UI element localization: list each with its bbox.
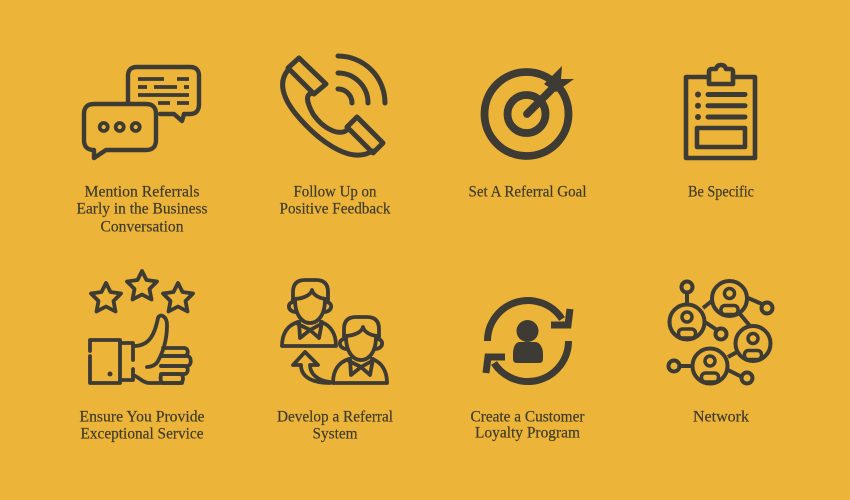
label: referral system: System	[312, 426, 358, 442]
label: loyalty program: Create a Customer	[470, 408, 585, 426]
label: exceptional service: Ensure You Provide	[80, 408, 204, 426]
label: referral goal: Set A Referral Goal	[468, 184, 587, 200]
icon: target with dart	[484, 66, 574, 156]
panel: loyalty program	[470, 301, 585, 442]
label: mention referrals	[76, 184, 208, 236]
label: mention referrals: Mention Referrals	[84, 184, 200, 200]
label: mention referrals: Early in the Business	[76, 200, 208, 218]
icon: lower person	[333, 317, 387, 383]
icon: chat bubbles	[84, 67, 199, 158]
icon: two people with arrow	[282, 280, 387, 383]
icon: upper person	[282, 280, 336, 346]
label: be specific: Be Specific	[688, 184, 754, 200]
label: referral system: Develop a Referral	[277, 408, 394, 426]
label: mention referrals: Conversation	[100, 218, 184, 236]
panel: be specific	[686, 65, 755, 200]
icon: thumbs up with stars	[90, 271, 193, 383]
panel: exceptional service	[80, 271, 204, 442]
icon: person in circular arrows	[486, 301, 570, 381]
label: referral system	[277, 408, 394, 442]
panel: referral system	[277, 280, 394, 442]
icon: network of people	[668, 281, 772, 384]
icon: curved arrow	[293, 352, 330, 383]
label: follow up	[280, 184, 390, 218]
label: follow up: Positive Feedback	[280, 200, 390, 218]
label: loyalty program	[470, 408, 585, 442]
panel: follow up	[280, 56, 390, 218]
icon: phone with signal waves	[283, 56, 385, 155]
label: loyalty program: Loyalty Program	[475, 424, 581, 442]
label: network: Network	[693, 408, 749, 426]
panel: referral goal	[468, 66, 587, 200]
label: exceptional service: Exceptional Service	[80, 426, 204, 442]
panel: network	[668, 281, 772, 426]
label: exceptional service	[80, 408, 204, 442]
label: follow up: Follow Up on	[294, 184, 376, 200]
panel: mention referrals	[76, 67, 208, 236]
icon: clipboard	[686, 65, 755, 158]
